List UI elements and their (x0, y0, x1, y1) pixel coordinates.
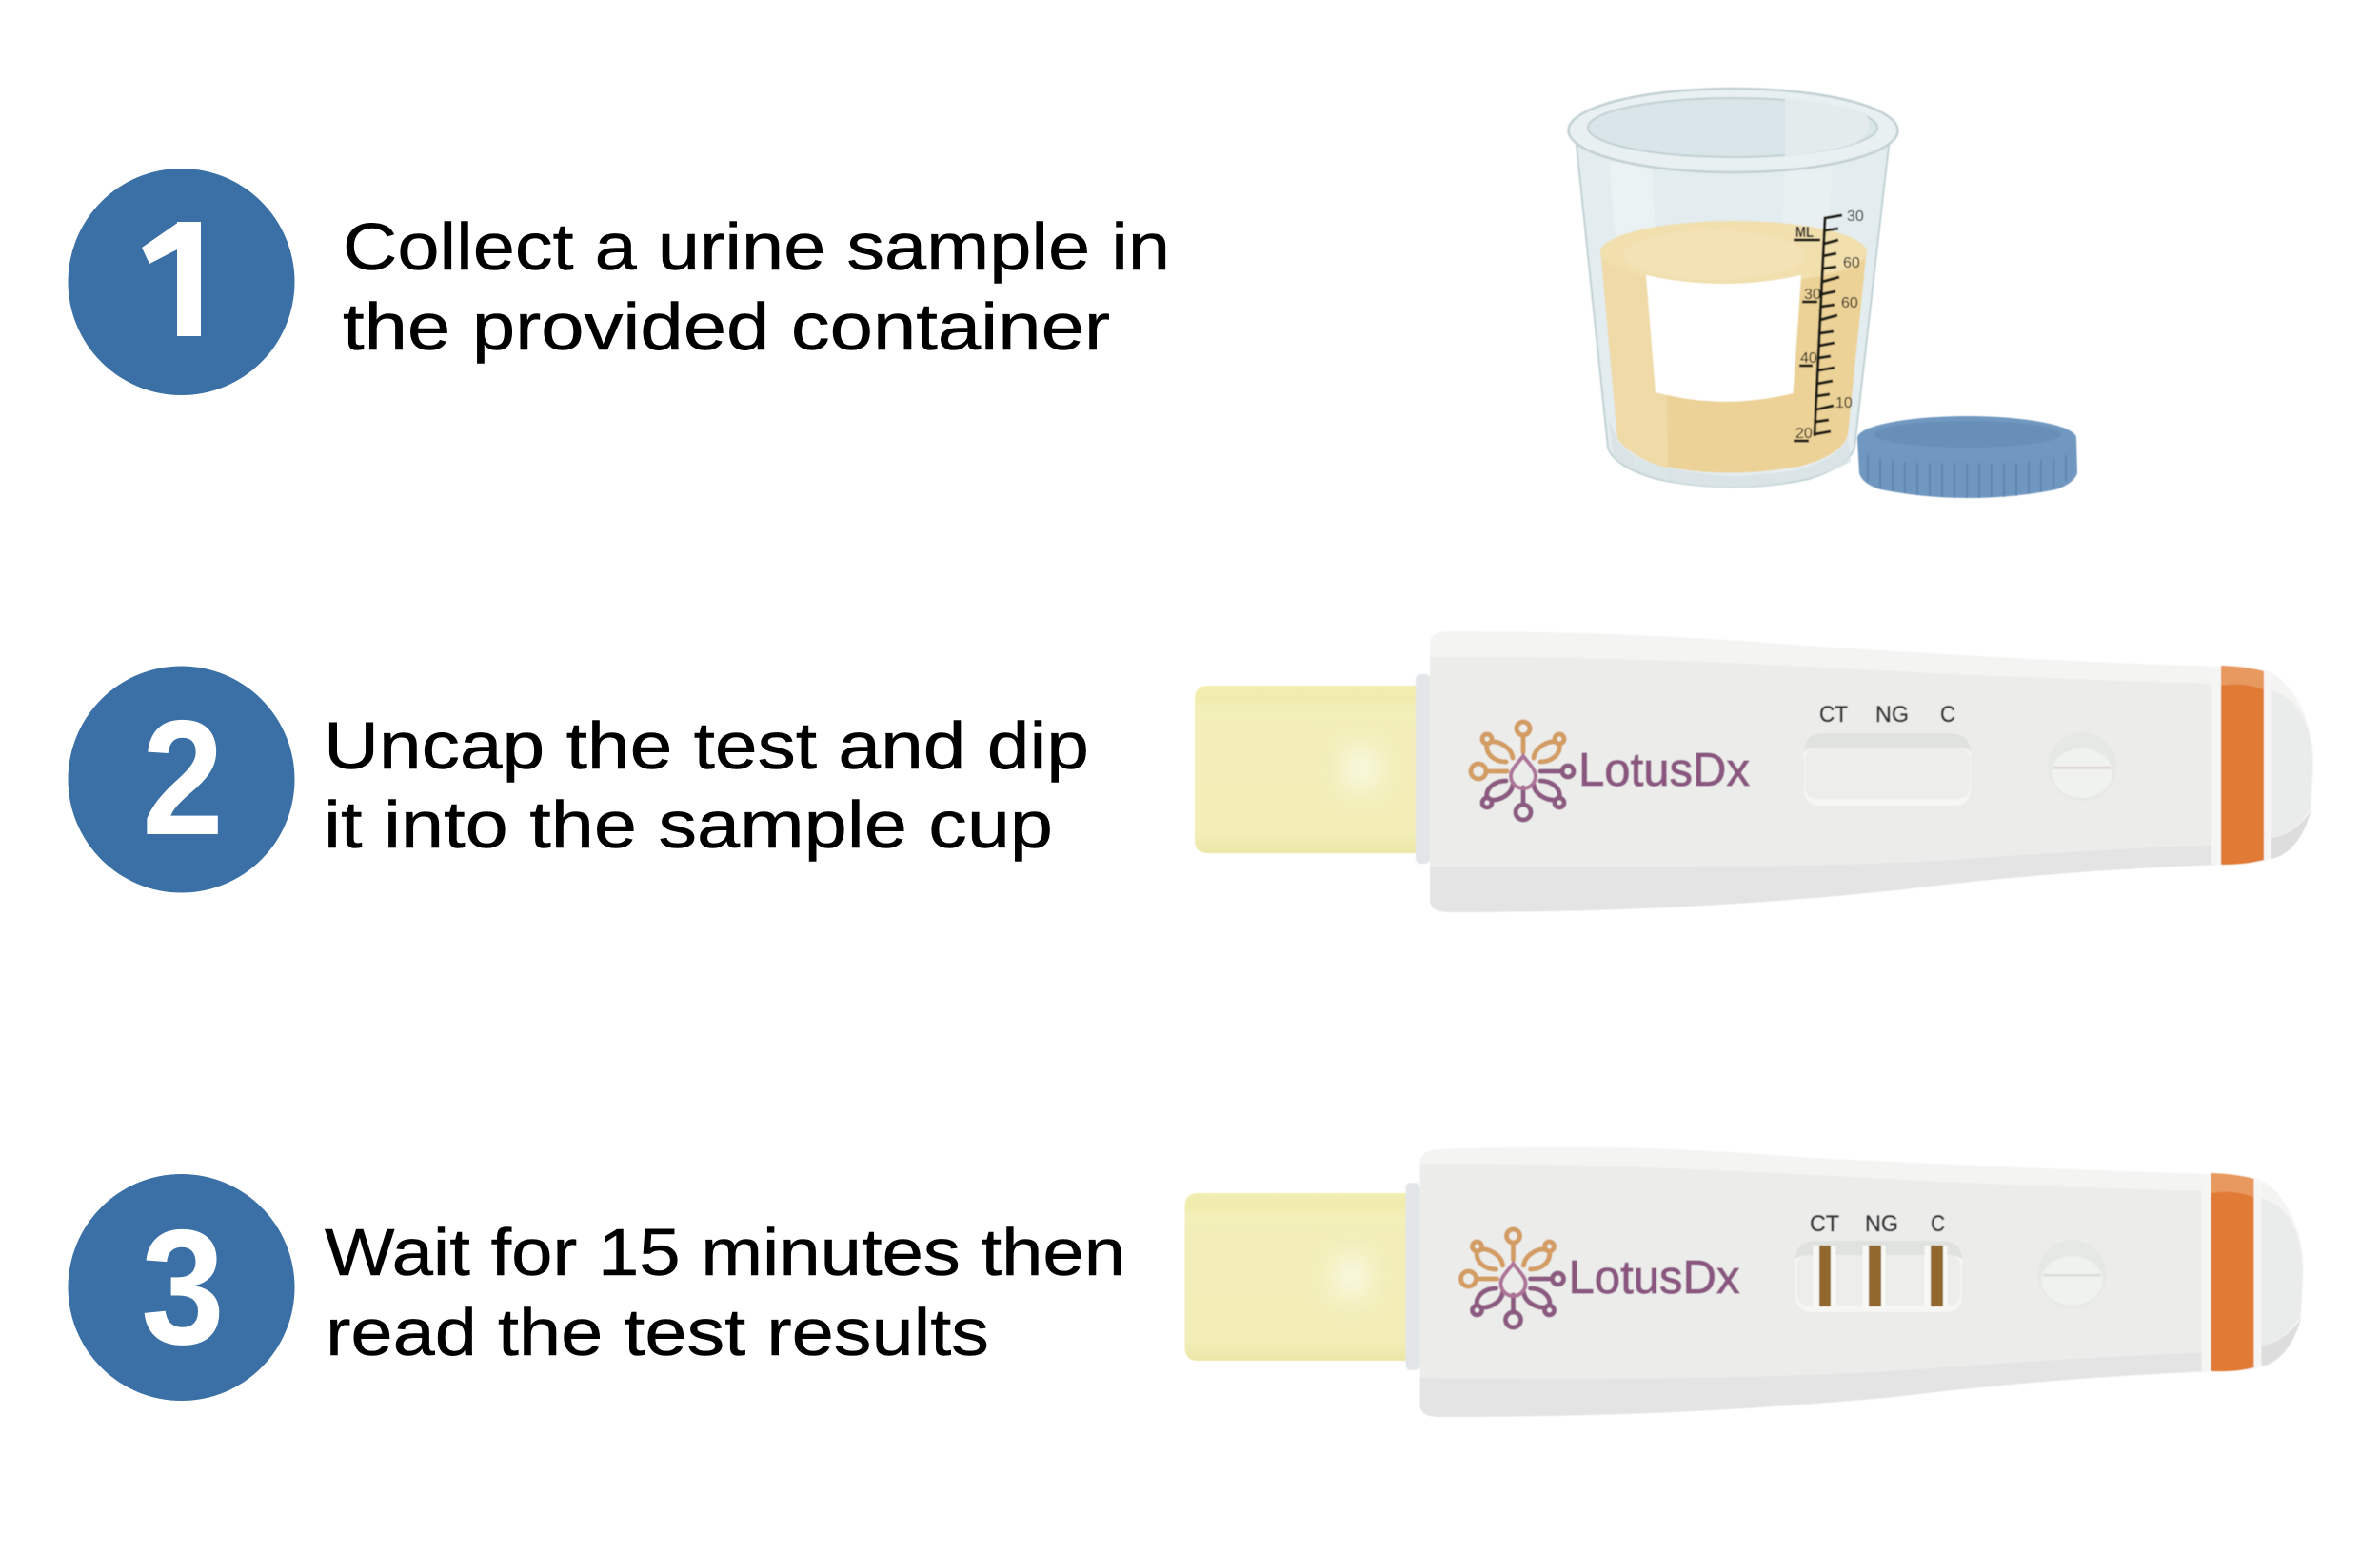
step 3 text: Wait for 15 minutes then (325, 1215, 1125, 1289)
face panel (1420, 1164, 2211, 1379)
measurement scale: 30 (1804, 287, 1821, 303)
blank label (1646, 275, 1801, 402)
measurement scale: ML (1795, 225, 1814, 241)
measurement scale: 10 (1835, 395, 1853, 411)
measurement scale: 60 (1843, 255, 1860, 271)
body (1430, 631, 2313, 912)
test device: positive result lines (1184, 1146, 2304, 1417)
measurement scale (1794, 209, 1864, 442)
step 2 number badge: 2 (142, 687, 224, 869)
step 3 text (325, 1215, 1125, 1369)
step 1 number badge (69, 169, 295, 395)
collar (1405, 1183, 1420, 1370)
result labels: NG (1865, 1211, 1898, 1237)
step 1 text: Collect a urine sample in (343, 209, 1170, 284)
result labels (1810, 1211, 1945, 1237)
yellow cap (1195, 686, 1416, 853)
cup body (1577, 146, 1889, 488)
step 1 text: the provided container (343, 289, 1110, 364)
test device: uncapped, no result (1195, 631, 2313, 912)
step 1 text (343, 209, 1170, 364)
measurement scale: 20 (1795, 426, 1813, 442)
lid (1857, 416, 2077, 498)
urine (1600, 221, 1867, 488)
step 1 number badge: 1 (149, 189, 228, 371)
sample well (2037, 1240, 2106, 1308)
face panel (1430, 657, 2221, 867)
logo wordmark: LotusDx (1569, 1252, 1740, 1304)
measurement scale: 60 (1841, 295, 1858, 311)
result labels: CT (1819, 702, 1848, 728)
end tip shading (2262, 1198, 2302, 1366)
result labels (1819, 702, 1955, 728)
result labels: C (1931, 1211, 1945, 1237)
sample well (2048, 732, 2116, 801)
rim (1569, 89, 1898, 172)
end tip shading (2271, 690, 2312, 859)
result labels: CT (1810, 1211, 1839, 1237)
orange band (2211, 1173, 2262, 1371)
step 2 text (324, 708, 1089, 862)
step 3 number badge: 3 (141, 1196, 225, 1379)
measurement scale: 40 (1800, 350, 1817, 367)
step 3 text: read the test results (326, 1295, 989, 1369)
logo (1471, 722, 1574, 820)
measurement scale: 30 (1847, 209, 1864, 225)
collar (1416, 674, 1430, 864)
logo wordmark: LotusDx (1578, 745, 1750, 796)
step 3 number badge (69, 1174, 295, 1401)
result labels: C (1940, 702, 1955, 728)
result labels: NG (1875, 702, 1909, 728)
orange band (2221, 666, 2271, 865)
body (1420, 1146, 2304, 1417)
logo (1460, 1229, 1563, 1327)
step 2 text: it into the sample cup (324, 787, 1053, 862)
result window (1804, 733, 1971, 806)
yellow cap (1184, 1193, 1405, 1361)
result window with lines (1795, 1241, 1962, 1312)
step 2 text: Uncap the test and dip (324, 708, 1089, 783)
illustration: urine sample cup and lid (1569, 89, 2077, 498)
step 2 number badge (69, 667, 295, 893)
